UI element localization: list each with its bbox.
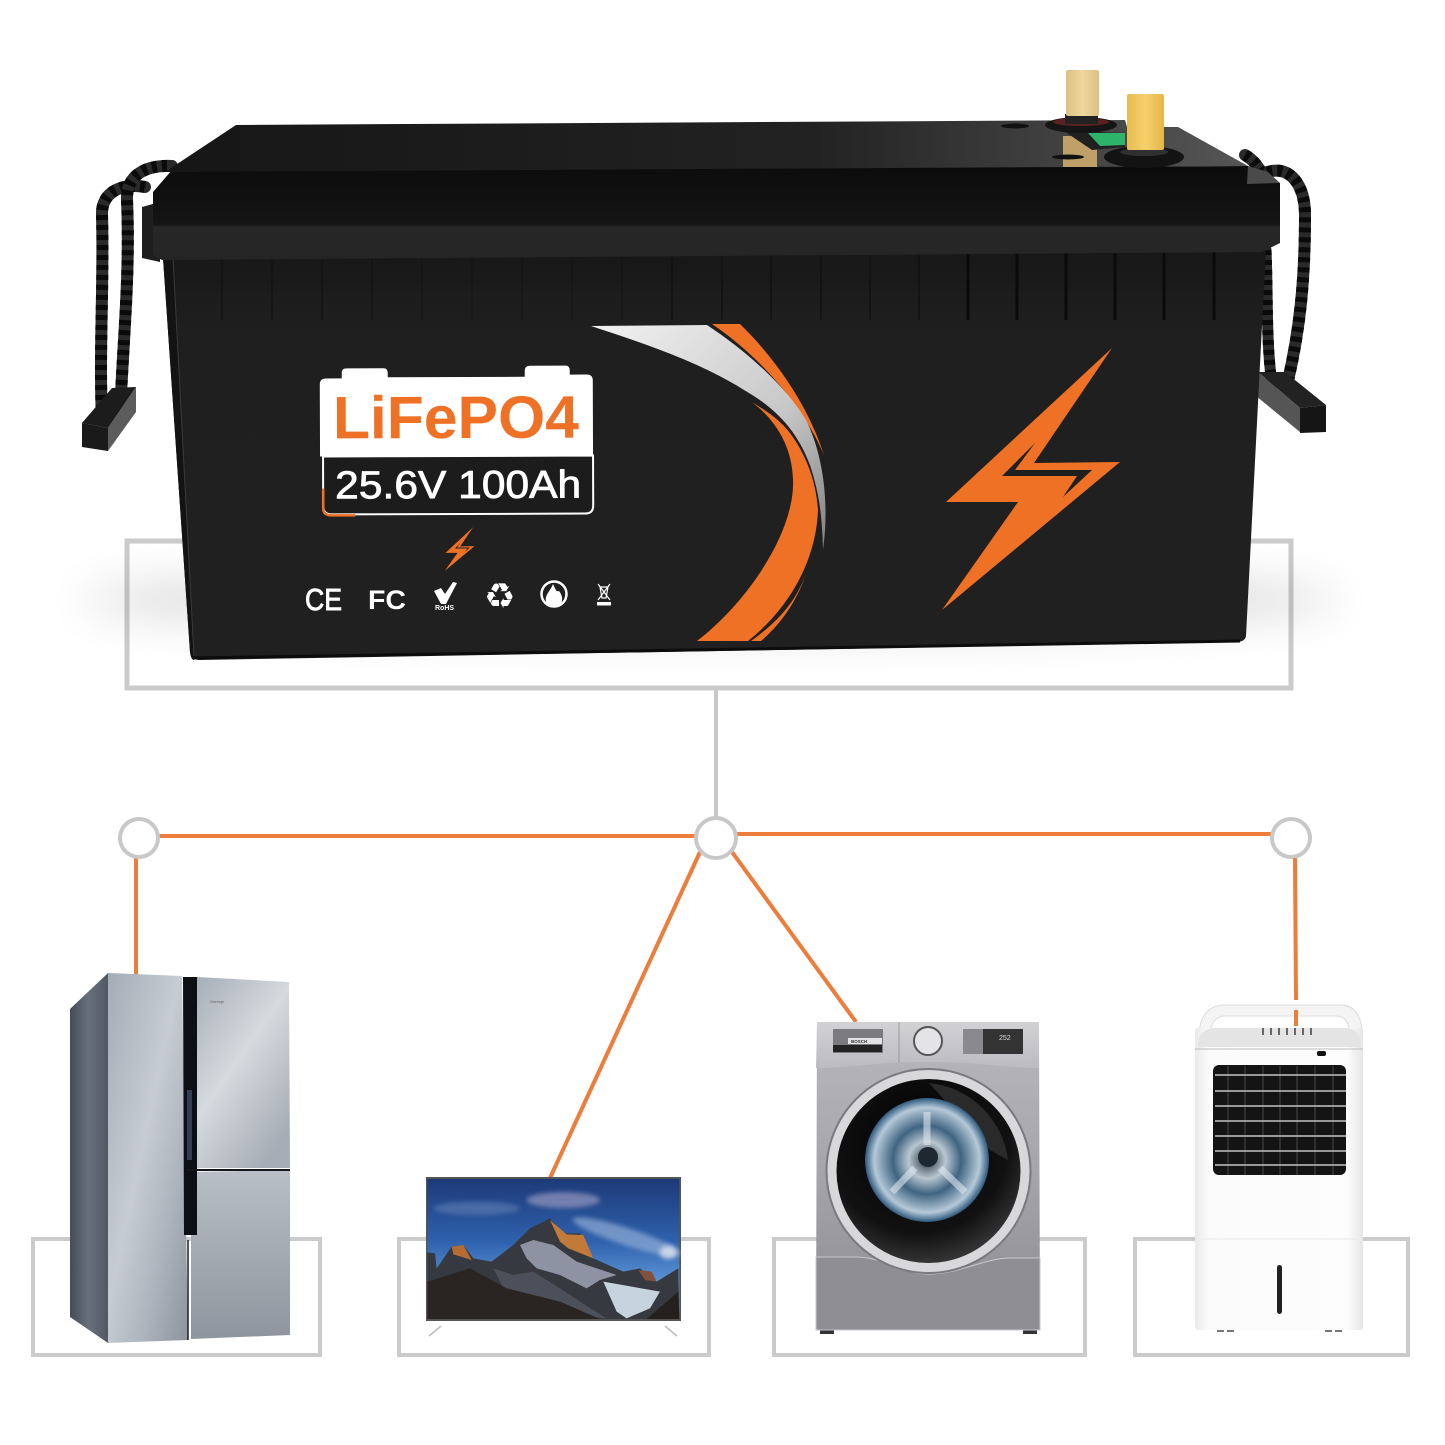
orange wire: left branch (158, 834, 697, 838)
TV frame (399, 1239, 709, 1355)
FCC mark: FC (368, 585, 406, 615)
centre node (696, 818, 736, 858)
lid right corner (1247, 166, 1280, 184)
left carrying rope (101, 166, 172, 420)
washer control panel: 252 (999, 1035, 1011, 1042)
label title: LiFePO4 (333, 384, 580, 451)
battery ground shadow (80, 564, 1340, 636)
television (426, 1177, 683, 1336)
battery frame (127, 541, 1291, 688)
washer frame (774, 1239, 1085, 1355)
left node (120, 819, 158, 857)
vertical ribs (222, 252, 1214, 320)
cooler grille (1213, 1065, 1346, 1175)
large lightning bolt (942, 348, 1120, 610)
left rope handle block (82, 387, 136, 451)
right carrying rope (1245, 155, 1305, 385)
disposal mark (597, 584, 611, 606)
LiFePO4 label (320, 366, 593, 515)
RoHS mark (434, 582, 457, 612)
TV legs (429, 1326, 677, 1336)
positive terminal (1104, 94, 1184, 168)
orange wire: to washer (732, 852, 856, 1022)
fridge frame (33, 1239, 320, 1355)
water level gauge (1277, 1265, 1282, 1314)
air cooler (1195, 858, 1363, 1332)
orange wire: to fridge (134, 857, 138, 975)
right node (1272, 819, 1310, 857)
washer control panel: BOSCH (851, 1039, 867, 1044)
washing machine (816, 1022, 1040, 1334)
refrigerator: Gorenje (210, 999, 225, 1004)
washer control panel (816, 1022, 1039, 1068)
right rope handle block (1256, 372, 1326, 433)
battery (142, 70, 1280, 660)
connector from battery to hub (714, 689, 718, 820)
battery body (163, 248, 1266, 660)
recycling mark: ♻ (484, 577, 515, 617)
swoosh graphic (591, 324, 826, 641)
cooler feet (1217, 1330, 1342, 1332)
small lightning bolt (445, 527, 475, 571)
lid side ear (142, 202, 160, 262)
label voltage and capacity: 25.6V 100Ah (335, 464, 581, 507)
negative terminal (1045, 70, 1117, 133)
flame mark (542, 582, 566, 606)
cooler handle (1199, 1005, 1362, 1032)
top panel (1001, 124, 1125, 160)
lid top face (165, 120, 1248, 172)
CE mark: CE (305, 582, 342, 617)
terminal reflection (1063, 136, 1097, 167)
orange wire into cooler (1295, 858, 1296, 1026)
refrigerator (70, 973, 290, 1343)
washer door (826, 1069, 1030, 1273)
RoHS mark: RoHS (435, 605, 454, 612)
orange wire: to TV (550, 852, 700, 1178)
lid front (153, 166, 1280, 260)
washer base (816, 1257, 1040, 1330)
TV screen picture (427, 1179, 683, 1319)
orange wire: right branch (736, 832, 1271, 836)
cooler frame (1135, 1239, 1408, 1355)
